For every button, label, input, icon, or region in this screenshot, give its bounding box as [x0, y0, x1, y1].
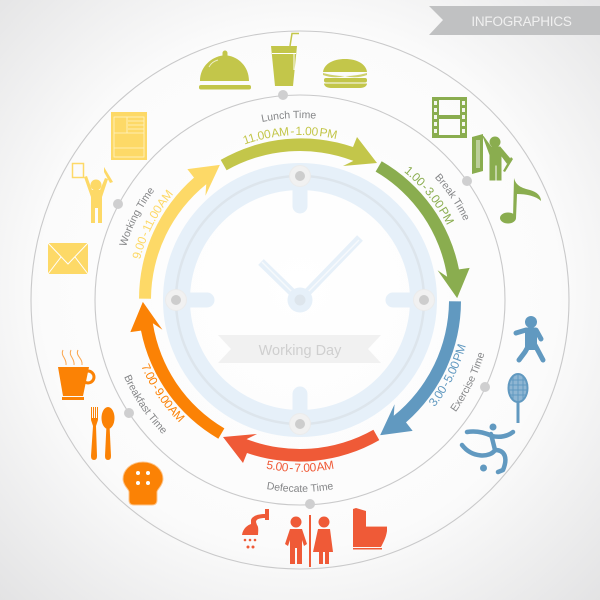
- arrow: breakfast: [120, 298, 227, 450]
- icon: person with film: [472, 134, 513, 180]
- activity labels: [94, 110, 528, 535]
- icon: coffee cup: [58, 350, 94, 400]
- icon: divider: [309, 515, 311, 567]
- icon: soccer player: [462, 424, 513, 472]
- icon: burger: [323, 59, 367, 88]
- arrow: lunch: [221, 137, 377, 170]
- activity labels: Break Time: [435, 173, 468, 220]
- ring dots: [113, 90, 490, 509]
- clock: [166, 166, 434, 434]
- time labels: 1.00 - 3.00 PM: [404, 167, 454, 225]
- icons: working: [48, 112, 147, 274]
- arrow: break: [373, 150, 480, 302]
- time labels: 3.00 - 5.00 PM: [429, 344, 466, 406]
- icon: person with paper: [72, 164, 113, 223]
- ribbon: working day: [218, 335, 381, 363]
- activity labels: Lunch Time: [262, 110, 316, 122]
- banner: infographics: INFOGRAPHICS: [471, 14, 572, 29]
- icons: breakfast: [58, 350, 163, 505]
- icon: racket: [508, 374, 528, 423]
- icons: exercise: [462, 316, 543, 472]
- icon: toilet: [353, 508, 387, 550]
- icon: envelope: [48, 243, 88, 274]
- arrow: exercise: [374, 296, 481, 448]
- icon: document: [111, 112, 147, 160]
- icon: drink: [271, 34, 299, 86]
- icon: toast: [123, 462, 163, 505]
- inner ring: [95, 95, 505, 505]
- icon: woman: [313, 516, 333, 564]
- time labels: 11.00 AM - 1.00 PM: [243, 126, 337, 144]
- icon: fork and spoon: [91, 407, 114, 460]
- time labels: 9.00 - 11.00 AM: [132, 190, 173, 259]
- icons: lunch: [199, 34, 367, 90]
- time labels: [132, 126, 466, 472]
- icon: shower: [242, 509, 269, 548]
- arrow: defecate: [223, 430, 379, 463]
- time labels: 5.00 - 7.00 AM: [266, 460, 334, 472]
- banner: infographics: [429, 6, 600, 35]
- icon: runner: [516, 316, 543, 360]
- icon: cloche: [199, 50, 251, 90]
- icon: music note: [500, 178, 541, 224]
- icon: film strip: [432, 97, 467, 138]
- icon: man: [285, 516, 307, 564]
- time labels: 7.00 - 9.00 AM: [142, 363, 185, 422]
- icons: defecate: [242, 508, 387, 567]
- activity labels: Exercise Time: [450, 352, 484, 412]
- ribbon: working day: Working Day: [259, 343, 342, 359]
- activity labels: Defecate Time: [267, 482, 333, 492]
- activity labels: Breakfast Time: [124, 374, 166, 434]
- arrow: working: [119, 152, 226, 304]
- icons: break: [432, 97, 541, 224]
- activity labels: Working Time: [119, 188, 154, 245]
